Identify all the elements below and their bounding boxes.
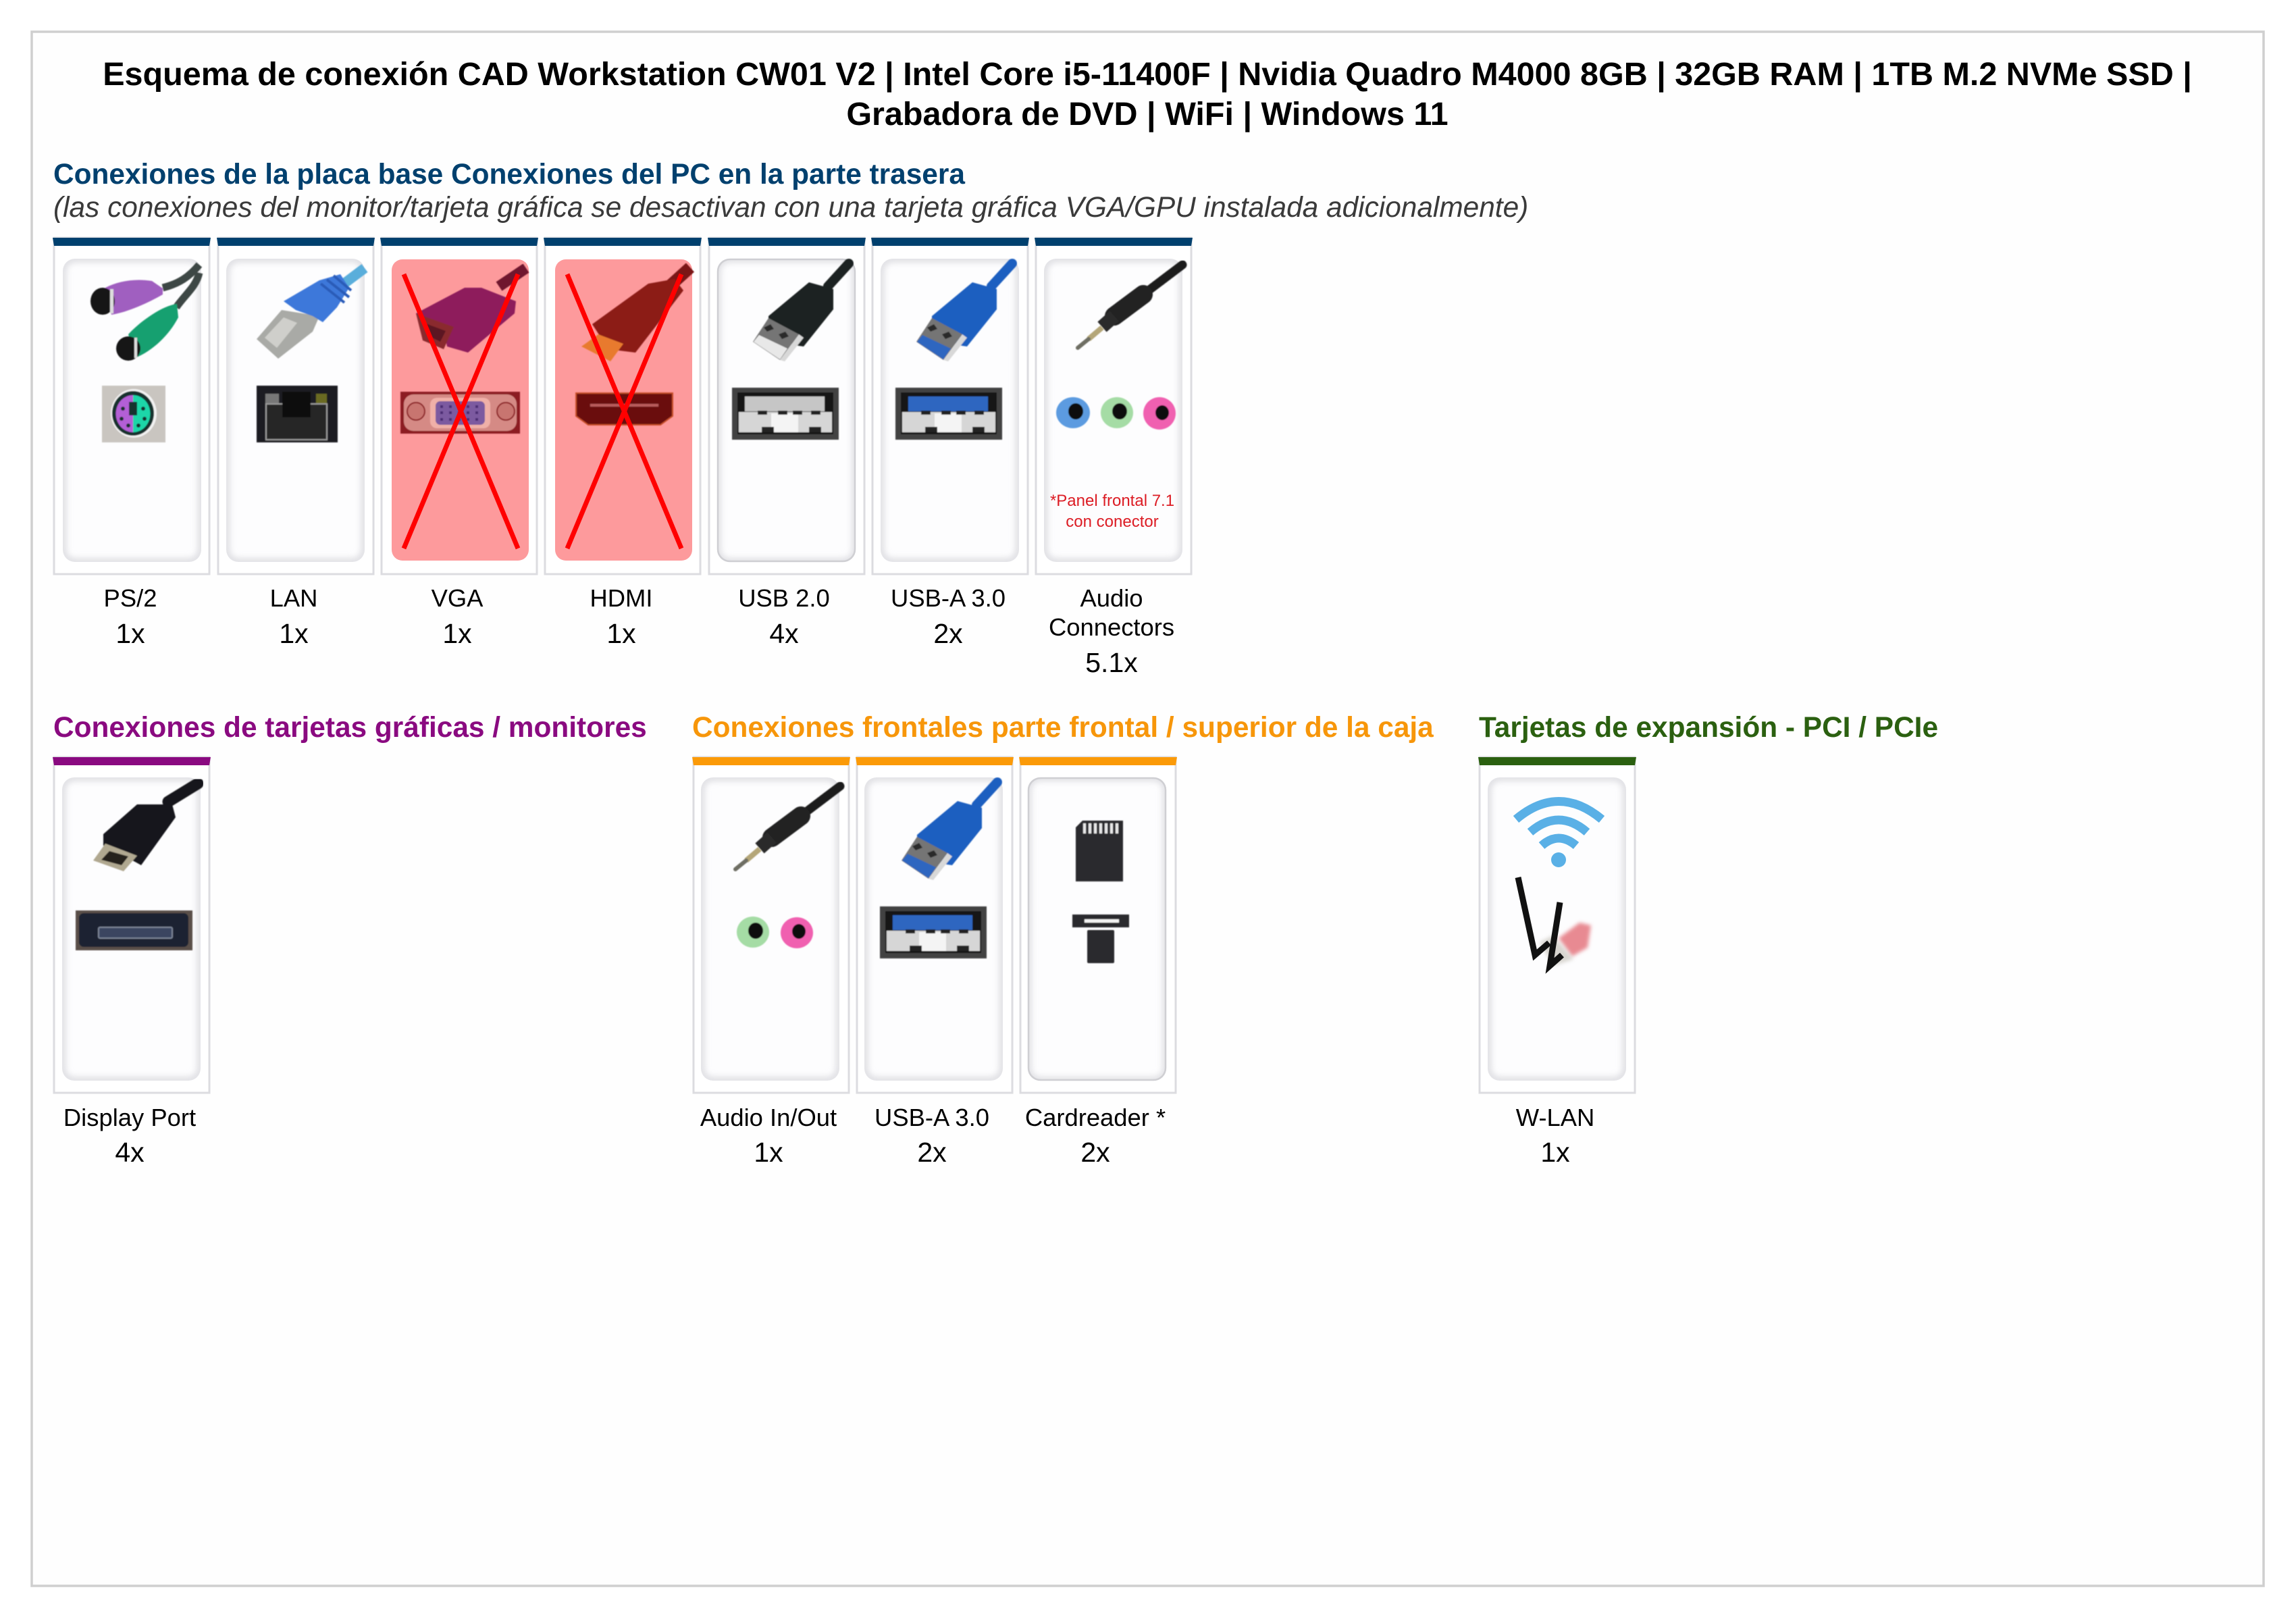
- icon: USB 3.0 port: [880, 906, 987, 958]
- card: Display Port: [53, 757, 211, 1168]
- quantity: Cardreader: 2x: [1080, 1137, 1110, 1168]
- card: Audio In/Out: [692, 757, 850, 1168]
- label: USB-A 3.0: USB-A 3.0: [891, 584, 1006, 612]
- label: Audio Connectors: Audio: [1080, 584, 1143, 612]
- icon: VGA plug: [416, 268, 526, 353]
- card: Cardreader: [1019, 757, 1177, 1168]
- heading: graphics cards: Conexiones de tarjetas gráficas / monitores: [53, 711, 647, 743]
- red disabled panel: [392, 259, 529, 561]
- quantity: USB-A 3.0: 2x: [917, 1137, 947, 1168]
- quantity: USB 2.0: 4x: [769, 618, 799, 649]
- label: W-LAN: W-LAN: [1516, 1104, 1594, 1131]
- icon: PS/2 port: [102, 386, 165, 442]
- icon: audio jack: [1078, 265, 1182, 348]
- note: graphics card disables onboard video: (las conexiones del monitor/tarjeta gráfica se desactivan con una tarjeta gráfica VGA/GPU instalada adicionalmente): [53, 191, 1528, 223]
- label: Audio Connectors: [1049, 584, 1174, 641]
- icon: SD card: [1076, 821, 1123, 881]
- quantity: VGA: 1x: [442, 618, 472, 649]
- heading: motherboard connections: Conexiones de la placa base Conexiones del PC en la parte trasera: [53, 158, 965, 190]
- icon: audio ports: [1056, 397, 1176, 430]
- quantity: LAN: 1x: [279, 618, 309, 649]
- card: VGA (disabled): [380, 238, 538, 649]
- icon: USB 3.0 plug: [916, 263, 1012, 361]
- note: front panel 7.1: *Panel frontal 7.1: [1050, 492, 1174, 510]
- title: [103, 56, 2192, 132]
- icon: USB 2.0 plug: [753, 263, 849, 361]
- note: front panel 7.1: [1050, 492, 1174, 531]
- icon: card reader slot: [1072, 915, 1129, 963]
- section: graphics card connections: [53, 711, 647, 1168]
- cross: disabled: [404, 274, 518, 548]
- label: Cardreader: Cardreader *: [1025, 1104, 1166, 1131]
- quantity: W-LAN: 1x: [1540, 1137, 1570, 1168]
- icon: Display Port socket: [76, 910, 192, 950]
- title: Grabadora de DVD | WiFi | Windows 11: [846, 96, 1449, 132]
- cross: disabled: [567, 274, 681, 548]
- card: USB-A 3.0 front: [856, 757, 1014, 1168]
- heading: front connections: Conexiones frontales parte frontal / superior de la caja: [692, 711, 1434, 743]
- red disabled panel: [555, 259, 692, 561]
- quantity: USB-A 3.0: 2x: [933, 618, 963, 649]
- label: PS/2: PS/2: [104, 584, 157, 612]
- label: VGA: VGA: [432, 584, 484, 612]
- icon: LAN port: [257, 386, 338, 442]
- icon: wifi card with antennas: [1518, 877, 1591, 966]
- quantity: Display Port: 4x: [115, 1137, 145, 1168]
- icon: HDMI port: [576, 393, 673, 425]
- icon: USB 3.0 port: [895, 388, 1002, 440]
- card: PS/2: [53, 238, 211, 649]
- heading: expansion cards: Tarjetas de expansión - PCI / PCIe: [1479, 711, 1938, 743]
- icon: audio ports: [737, 917, 813, 948]
- quantity: HDMI: 1x: [606, 618, 636, 649]
- icon: HDMI plug: [581, 267, 690, 361]
- icon: PS/2 plugs: [90, 265, 199, 361]
- icon: Display Port plug: [93, 783, 198, 871]
- card: HDMI (disabled): [544, 238, 702, 649]
- title: Esquema de conexión CAD Workstation CW01 V2 | Intel Core i5-11400F | Nvidia Quadro M4000 8GB | 32GB RAM | 1TB M.2 NVMe SSD |: [103, 56, 2192, 93]
- quantity: PS/2: 1x: [115, 618, 145, 649]
- label: Audio In/Out: Audio In/Out: [700, 1104, 837, 1131]
- note: front panel 7.1: con conector: [1066, 513, 1159, 531]
- section: motherboard rear connections: [53, 158, 1528, 678]
- icon: audio jack: [735, 786, 840, 869]
- label: LAN: LAN: [270, 584, 317, 612]
- quantity: Audio In/Out: 1x: [754, 1137, 783, 1168]
- card: LAN: [217, 238, 375, 649]
- section: expansion cards: [1478, 711, 1938, 1168]
- label: Display Port: Display Port: [63, 1104, 196, 1131]
- icon: USB 3.0 plug: [902, 782, 997, 880]
- card: USB 2.0: [708, 238, 866, 649]
- label: USB 2.0: USB 2.0: [738, 584, 830, 612]
- label: USB-A 3.0: USB-A 3.0: [875, 1104, 989, 1131]
- quantity: audio: 5.1x: [1085, 647, 1138, 678]
- icon: VGA port: [400, 392, 520, 434]
- label: Audio Connectors: Connectors: [1049, 613, 1174, 641]
- icon: LAN plug: [257, 268, 365, 359]
- card: USB-A 3.0: [871, 238, 1029, 649]
- icon: wifi symbol: [1516, 801, 1602, 867]
- section: front panel connections: [692, 711, 1434, 1168]
- icon: USB 2.0 port: [732, 388, 839, 440]
- card: Audio connectors: [1035, 238, 1193, 678]
- card: W-LAN: [1478, 757, 1636, 1168]
- label: HDMI: HDMI: [590, 584, 652, 612]
